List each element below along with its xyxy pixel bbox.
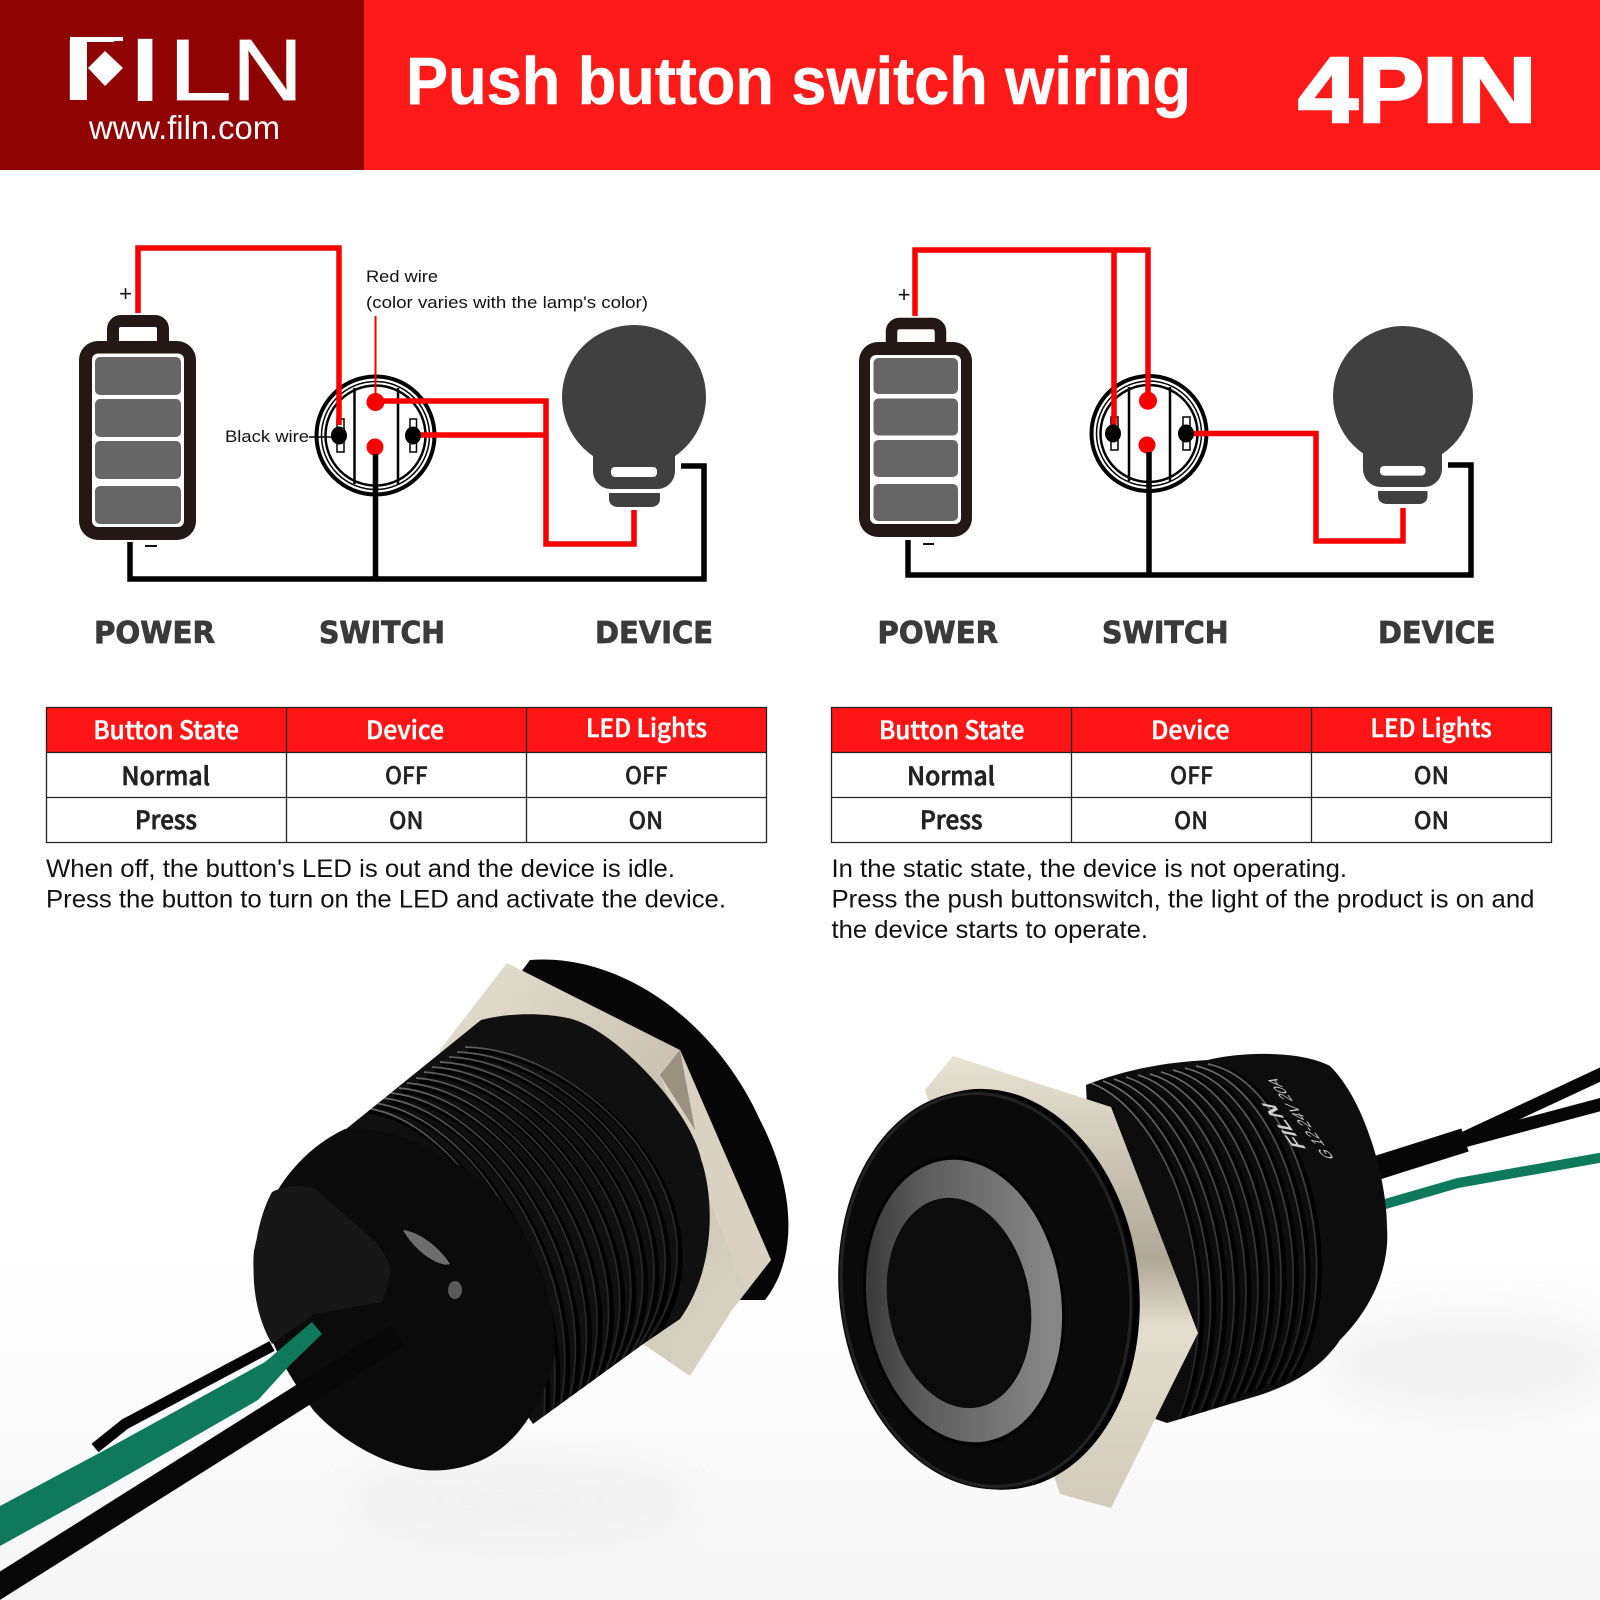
- table: left state table: Button State: [93, 711, 239, 747]
- label: power: POWER: [94, 616, 215, 651]
- table: right state table: [832, 708, 1552, 842]
- battery minus sign: [923, 543, 934, 545]
- 4PIN label: N: [1457, 38, 1537, 142]
- logo panel: F: [64, 22, 117, 119]
- 4PIN label: P: [1358, 38, 1424, 142]
- soft shadow: [350, 1460, 690, 1540]
- table: right state table: Press: [920, 801, 983, 837]
- button face: [871, 1186, 1047, 1420]
- rear flange ring: [500, 959, 788, 1300]
- text block: right description: In the static state, the device is not operating.: [832, 855, 1347, 883]
- wires: [1370, 1070, 1600, 1207]
- panel: left wiring diagram: [79, 248, 713, 651]
- label: device: DEVICE: [595, 616, 713, 651]
- body markings: G 12-24V 20A: [1262, 1075, 1339, 1161]
- logo panel: L: [168, 22, 232, 119]
- photo: front view of switch: [817, 1054, 1600, 1508]
- black wires: [130, 426, 704, 579]
- table: right state table: ON: [1174, 801, 1208, 836]
- red wires: [915, 250, 1403, 541]
- table: right state table: OFF: [1170, 756, 1213, 791]
- cap end face: [254, 1186, 390, 1344]
- table: right state table: ON: [1414, 801, 1449, 836]
- label: switch: SWITCH: [319, 616, 445, 651]
- hex nut: [925, 1056, 1198, 1508]
- threaded body: [335, 1014, 710, 1424]
- table: left state table: LED Lights: [586, 709, 707, 745]
- hex nut: [439, 963, 771, 1376]
- thread ridges: [1091, 1064, 1320, 1422]
- table: left state table: ON: [629, 801, 663, 836]
- icon: light bulb: [562, 325, 706, 507]
- thread ridges: [366, 1047, 680, 1419]
- red wire annotation: Red wire: [366, 267, 438, 286]
- icon: light bulb: [1333, 326, 1473, 504]
- icon: battery: [859, 324, 972, 537]
- table: left state table: OFF: [625, 756, 668, 791]
- logo panel: I: [133, 22, 157, 119]
- table: right state table: ON: [1414, 756, 1449, 791]
- battery minus sign: [145, 545, 157, 547]
- 4PIN label: 4: [1298, 38, 1358, 142]
- table: right state table: Normal: [907, 757, 995, 793]
- LED ring: [845, 1143, 1083, 1459]
- 4PIN label: [1298, 38, 1537, 142]
- icon: battery: [79, 321, 196, 540]
- panel: right wiring diagram: [859, 250, 1496, 651]
- table: left state table: ON: [389, 801, 424, 836]
- 4PIN label: I: [1420, 38, 1460, 142]
- body markings: FILN: [1257, 1101, 1312, 1151]
- logo panel: N: [232, 22, 303, 119]
- label: switch: SWITCH: [1102, 616, 1228, 651]
- text block: right description: the device starts to operate.: [832, 916, 1148, 944]
- table: left state table: Normal: [121, 757, 210, 793]
- logo panel: [0, 0, 364, 170]
- red wire annotation: (color varies with the lamp's color): [366, 293, 648, 312]
- table: left state table: Press: [135, 801, 197, 837]
- icon: switch terminal view: [1092, 376, 1206, 491]
- battery plus sign: +: [119, 281, 132, 306]
- soft shadow: [1320, 1310, 1600, 1410]
- text block: right description: Press the push buttonswitch, the light of the product is on and: [832, 886, 1534, 914]
- rear body: [1086, 1054, 1387, 1423]
- table: right state table: Button State: [879, 711, 1024, 747]
- label: power: POWER: [878, 616, 998, 651]
- table: right state table: LED Lights: [1370, 709, 1492, 745]
- photo: rear view of switch: [0, 959, 788, 1592]
- table: left state table: OFF: [385, 756, 428, 791]
- black wires: [908, 424, 1471, 575]
- title: Push button switch wiring: [406, 44, 1191, 119]
- header banner: [0, 0, 1600, 170]
- black wire annotation: [225, 427, 339, 446]
- battery plus sign: +: [898, 282, 910, 307]
- table: left state table: [46, 708, 766, 842]
- green and black wires: [0, 1322, 398, 1592]
- cap highlights: [403, 1230, 462, 1299]
- text block: left description: Press the button to turn on the LED and activate the device.: [46, 886, 726, 914]
- text block: left description: When off, the button's LED is out and the device is idle.: [46, 855, 675, 883]
- front bezel: [817, 1073, 1161, 1506]
- icon: switch terminal view: [316, 376, 434, 494]
- black wire annotation: Black wire: [225, 427, 309, 446]
- rear cap: [253, 1129, 555, 1471]
- red wires: [138, 248, 634, 544]
- label: device: DEVICE: [1378, 616, 1496, 651]
- table: right state table: Device: [1151, 711, 1230, 747]
- table: left state table: Device: [366, 711, 444, 747]
- photo background: [0, 950, 1600, 1600]
- logo panel: www.filn.com: [88, 109, 280, 146]
